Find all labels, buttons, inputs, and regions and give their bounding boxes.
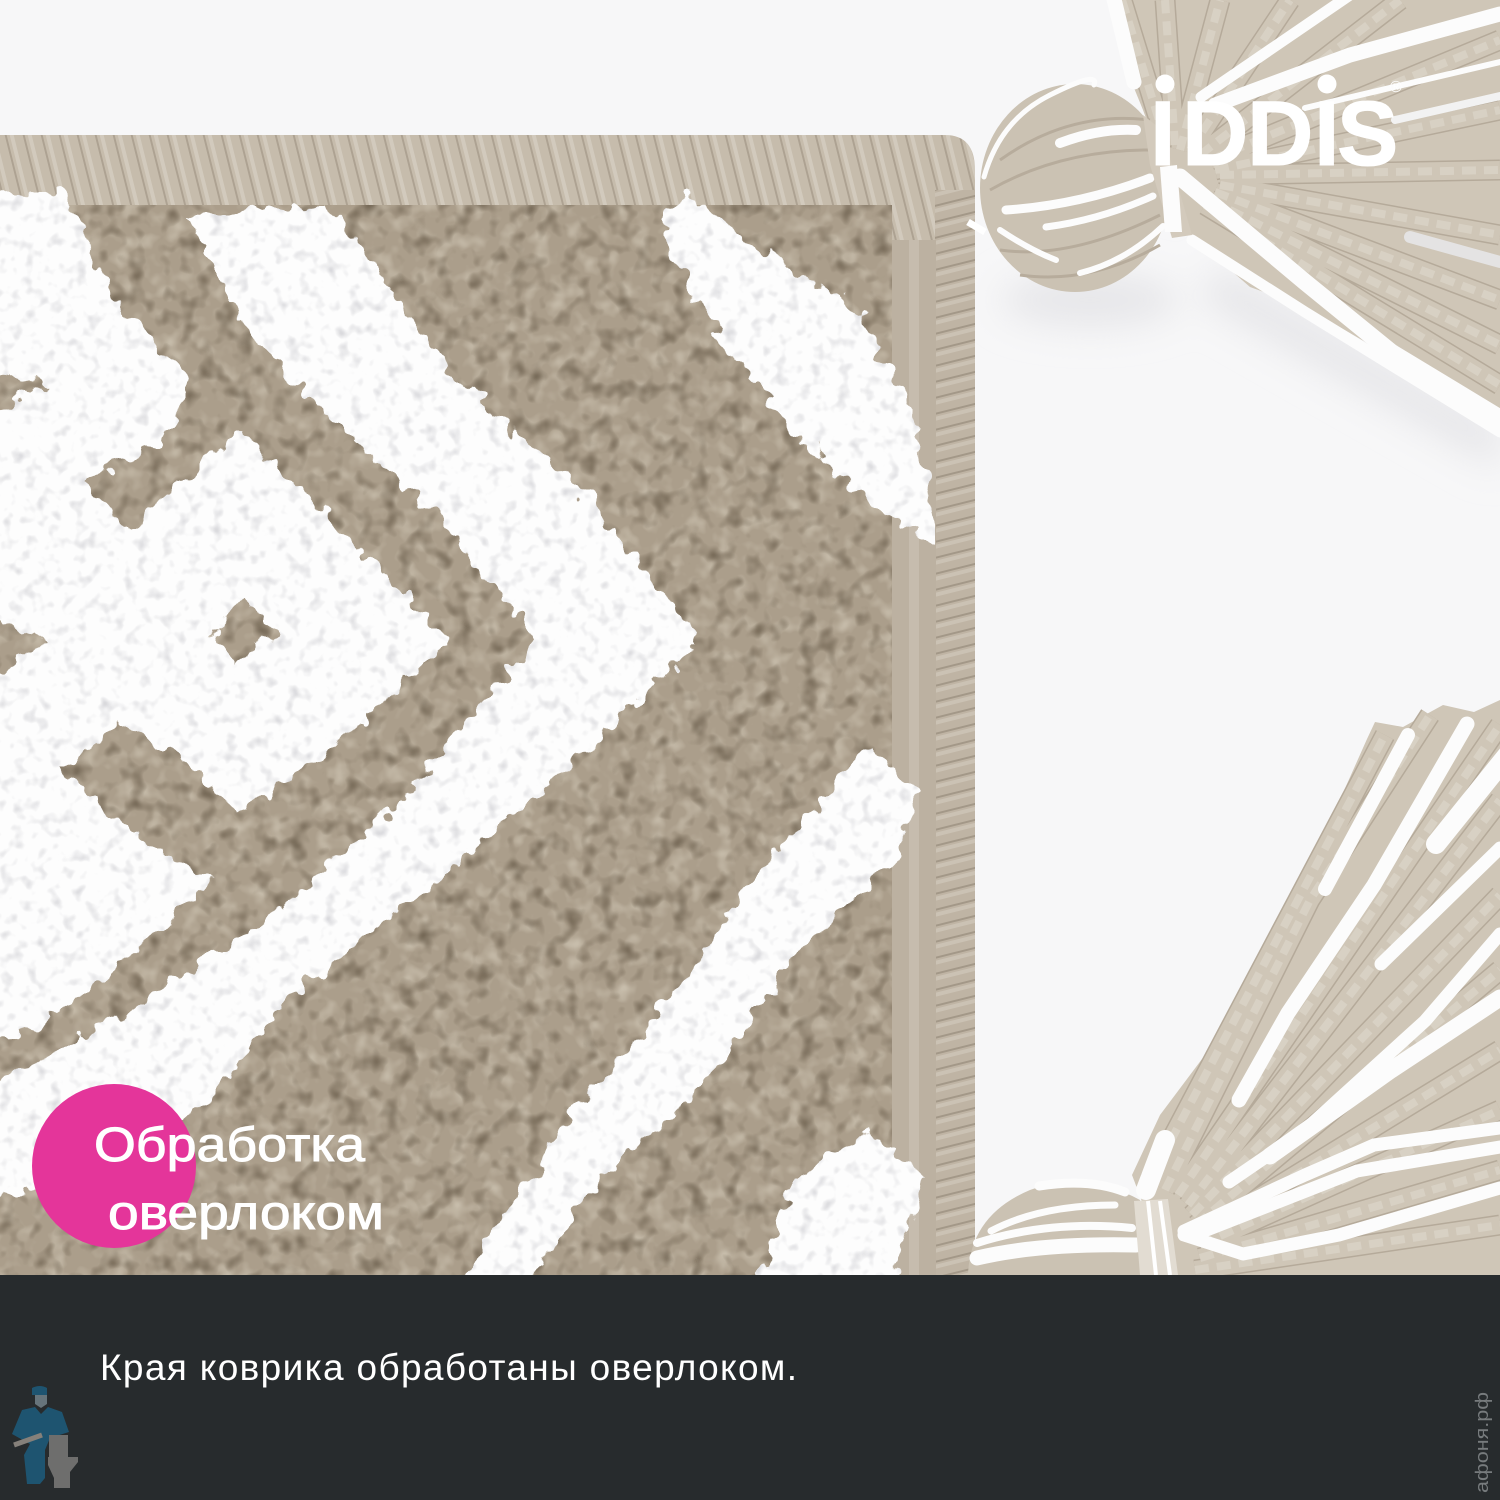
pattern: lower right patch bbox=[760, 1130, 928, 1290]
upper tassel bbox=[968, 0, 1500, 432]
tassel binding bbox=[1134, 1199, 1178, 1275]
registered mark: ® bbox=[1390, 79, 1402, 96]
overlock border bbox=[0, 135, 975, 1275]
white pattern bbox=[0, 190, 938, 1290]
label: overlock bbox=[32, 1084, 384, 1248]
rug photo bbox=[0, 135, 975, 1290]
strands fan bbox=[1133, 0, 1500, 408]
icon: plumber mascot bbox=[12, 1386, 78, 1488]
strands fan bbox=[1132, 700, 1500, 1275]
ball white strands bbox=[984, 79, 1163, 273]
logo bbox=[1150, 74, 1402, 185]
rug pile field bbox=[0, 205, 892, 1275]
pattern: chevron stripe bbox=[0, 205, 700, 1200]
logo wordmark: IDDIS bbox=[1150, 83, 1398, 185]
rope strands bbox=[1122, 0, 1500, 385]
rope strands bbox=[1150, 715, 1500, 1270]
lower tassel bbox=[968, 700, 1500, 1275]
white strands bbox=[1146, 724, 1500, 1254]
logo dots bbox=[1156, 74, 1336, 94]
tassel ball bbox=[968, 1182, 1140, 1275]
soft tassel shadow bbox=[1000, 265, 1500, 470]
label text: Обработка bbox=[94, 1119, 365, 1172]
footer text: Края коврика обработаны оверлоком. bbox=[100, 1347, 797, 1388]
pattern: upper right patch bbox=[655, 195, 938, 548]
watermark: афоня.рф bbox=[1472, 1392, 1492, 1493]
white strands bbox=[1113, 0, 1500, 432]
pattern: lower right stripe bbox=[455, 745, 915, 1290]
footer band bbox=[0, 1275, 1500, 1500]
pattern: central motif bbox=[0, 190, 450, 1048]
label text bbox=[94, 1119, 384, 1240]
tassel binding bbox=[1143, 115, 1192, 238]
ball white strands bbox=[977, 1183, 1136, 1258]
pink circle bbox=[32, 1084, 196, 1248]
tassel ball bbox=[980, 84, 1170, 292]
label text: оверлоком bbox=[108, 1187, 384, 1240]
